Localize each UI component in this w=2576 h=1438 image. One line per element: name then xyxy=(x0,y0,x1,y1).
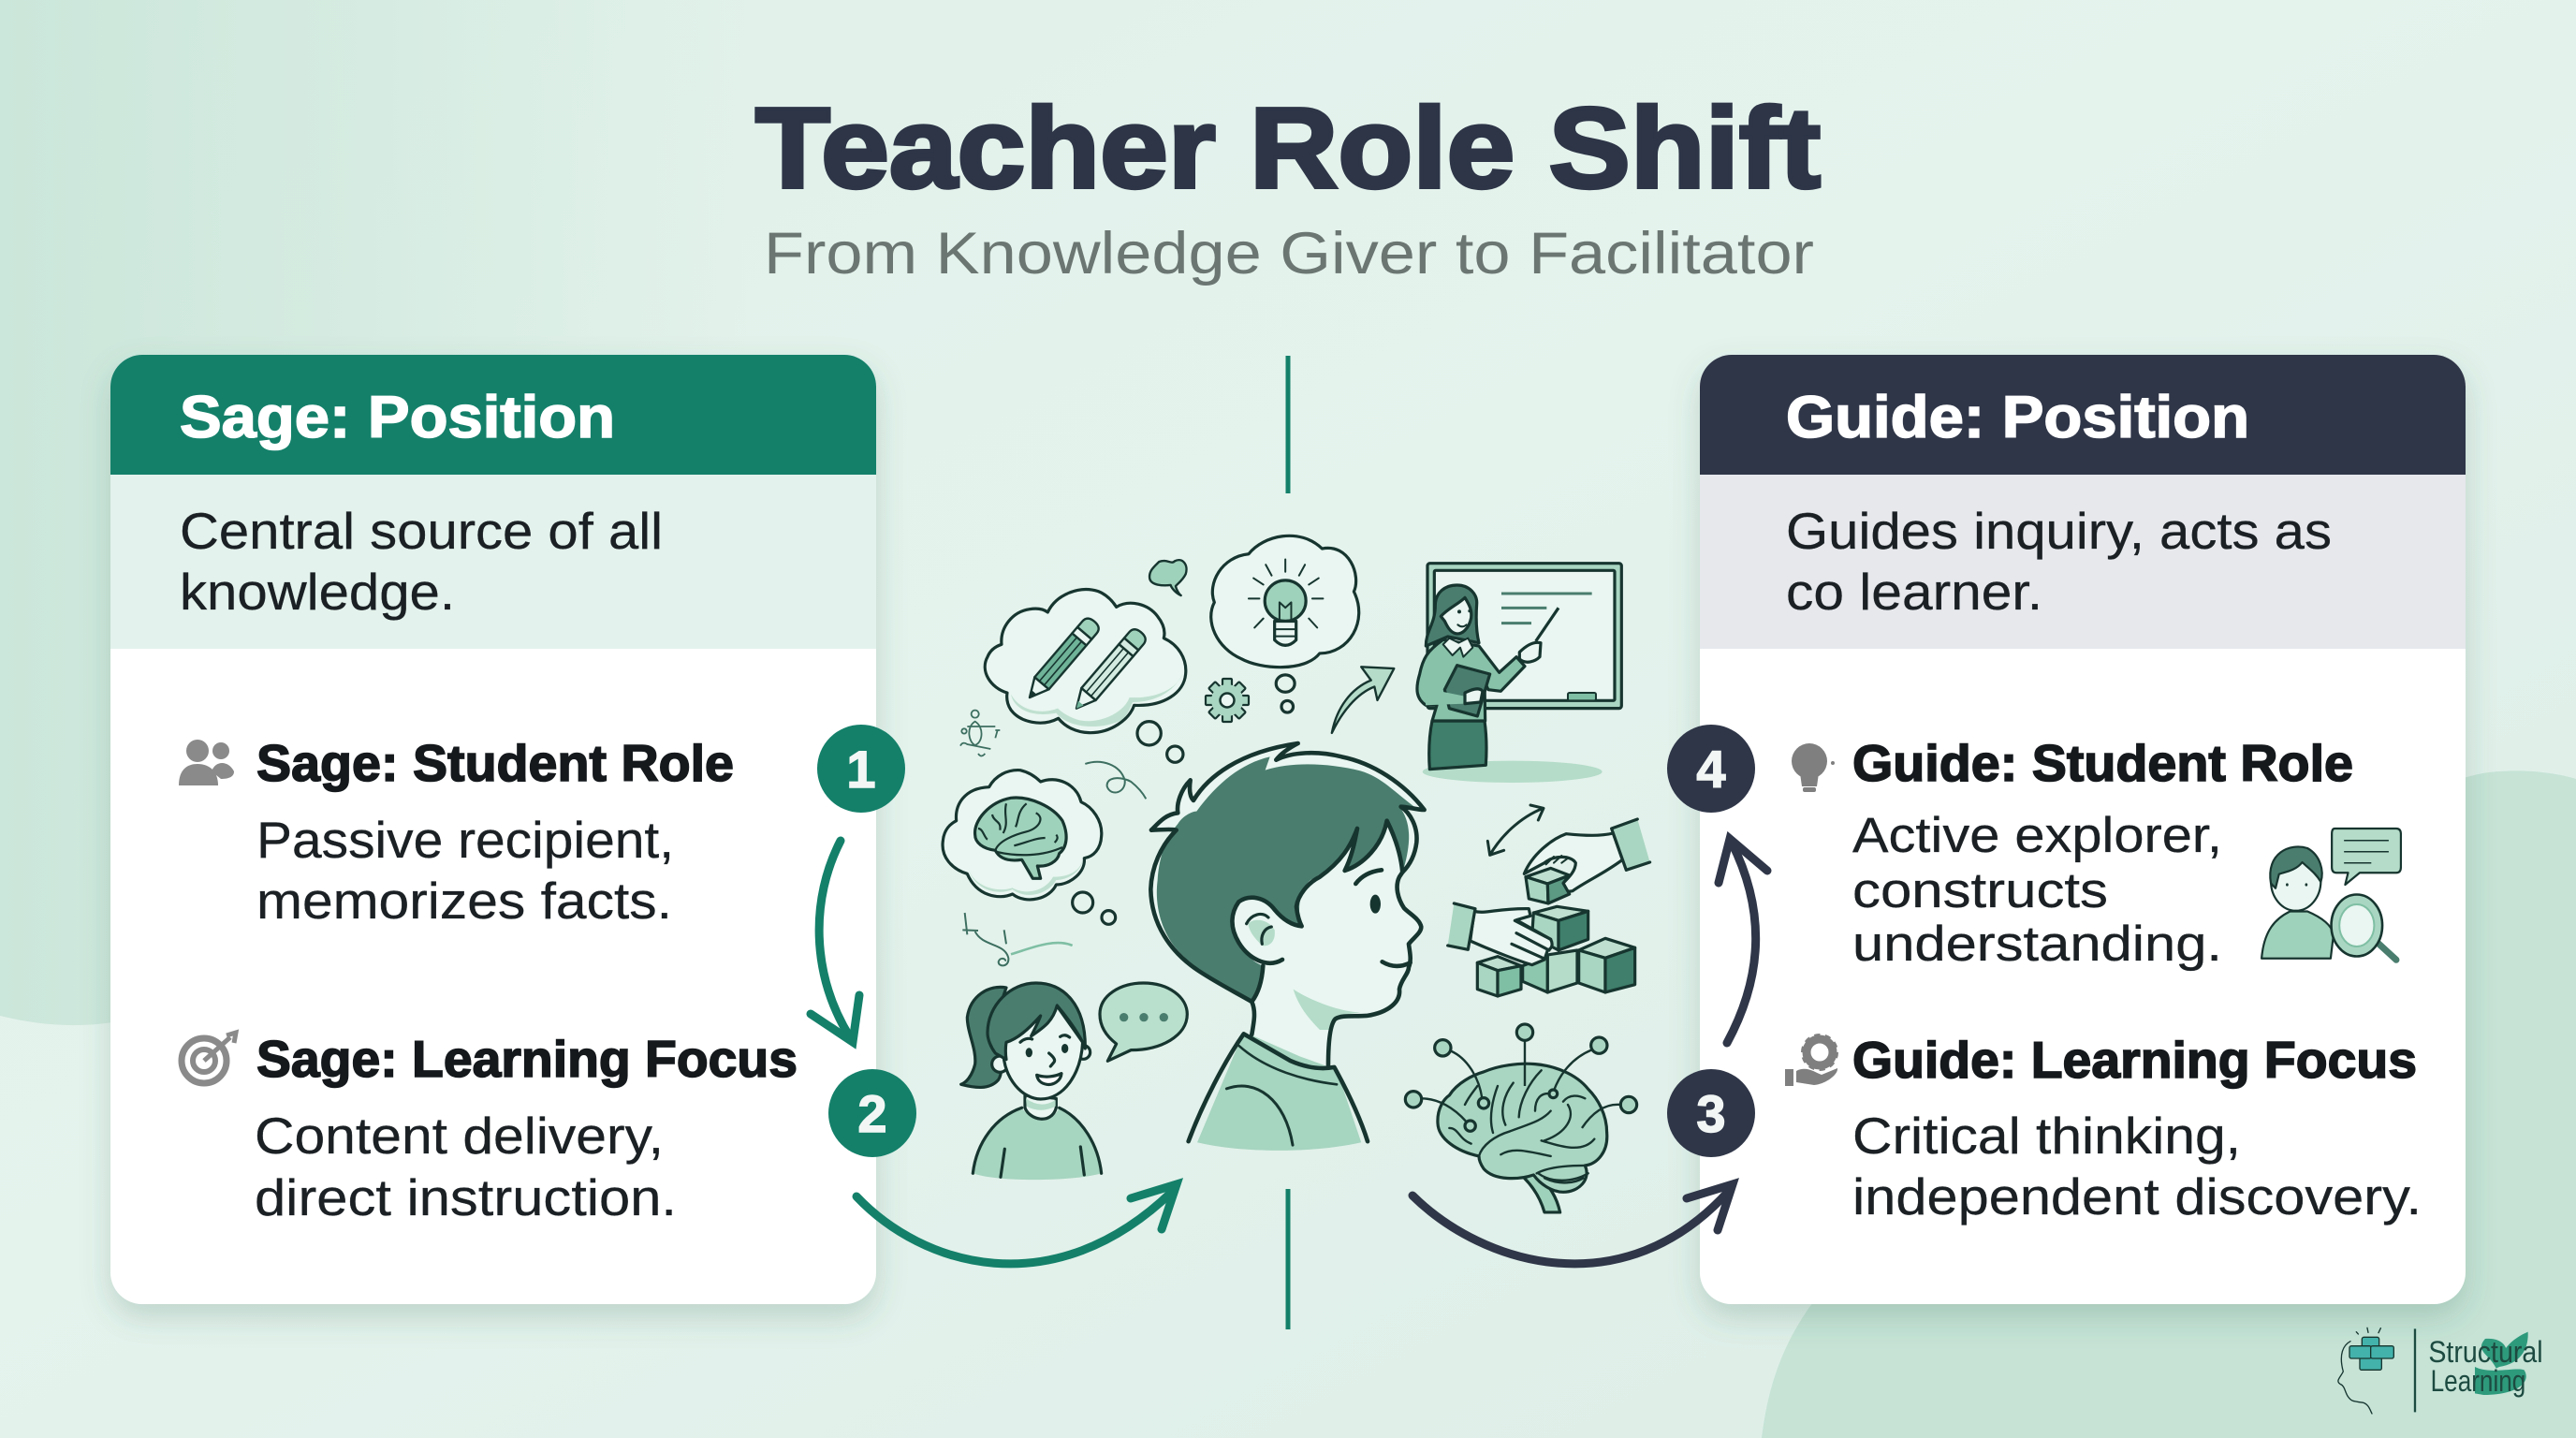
sage learning focus text: direct instruction. xyxy=(255,1168,677,1226)
arrow: 2 to centre xyxy=(856,1184,1177,1264)
divider bottom xyxy=(1286,1189,1290,1329)
step badge 1 xyxy=(817,725,905,813)
divider top xyxy=(1286,356,1290,493)
step badge 1: 1 xyxy=(846,740,876,799)
hands and blocks, connected brain xyxy=(1405,805,1650,1212)
guide header xyxy=(1700,355,2466,475)
subtitle: From Knowledge Giver to Facilitator xyxy=(764,221,1814,286)
thought cloud: lightbulb, arrow xyxy=(1211,536,1394,733)
guide learning focus text: independent discovery. xyxy=(1852,1167,2422,1225)
sage student role text: memorizes facts. xyxy=(256,872,672,930)
guide student role text: constructs xyxy=(1852,863,2108,918)
guide learning focus heading: Guide: Learning Focus xyxy=(1852,1031,2417,1089)
guide header title: Guide: Position xyxy=(1786,385,2249,450)
boy profile xyxy=(1150,743,1425,1151)
sage position text xyxy=(180,502,663,621)
icon: people xyxy=(179,740,234,785)
sage position text: knowledge. xyxy=(180,563,455,621)
sage position text: Central source of all xyxy=(180,502,663,560)
sage header title: Sage: Position xyxy=(180,385,615,450)
central illustration xyxy=(943,536,1650,1212)
sage student role heading: Sage: Student Role xyxy=(256,734,734,792)
sage header xyxy=(110,355,876,475)
guide student role text xyxy=(1852,808,2222,972)
sage student role text: Passive recipient, xyxy=(256,811,674,869)
icon: target xyxy=(182,1033,236,1083)
arrow: 1 to 2 xyxy=(811,841,859,1042)
icon: bulb xyxy=(1792,743,1835,792)
step badge 3: 3 xyxy=(1696,1084,1726,1143)
arrow: 3 to 4 xyxy=(1719,839,1767,1043)
sage learning focus text xyxy=(255,1107,677,1226)
guide position text: co learner. xyxy=(1786,563,2042,621)
guide position text xyxy=(1786,502,2332,621)
panel: guide xyxy=(1700,355,2466,1304)
guide card background xyxy=(1700,355,2466,1304)
guide position text: Guides inquiry, acts as xyxy=(1786,502,2332,560)
guide student role heading: Guide: Student Role xyxy=(1852,734,2353,792)
arrow: centre to 3 xyxy=(1412,1184,1733,1264)
teacher at whiteboard xyxy=(1417,564,1621,783)
step badge 4: 4 xyxy=(1696,740,1726,799)
step badge 2 xyxy=(828,1069,916,1157)
sage card background xyxy=(110,355,876,1304)
step badge 3 xyxy=(1667,1069,1755,1157)
icon: student with magnifier xyxy=(2261,829,2401,960)
guide position band xyxy=(1700,475,2466,649)
logo: Structural Learning xyxy=(2338,1328,2543,1414)
icon: gear xyxy=(1206,679,1249,722)
logo: Structural Learning: Structural xyxy=(2428,1334,2543,1369)
logo: Structural Learning: Learning xyxy=(2431,1363,2525,1398)
guide learning focus text: Critical thinking, xyxy=(1852,1107,2241,1165)
sage position band xyxy=(110,475,876,649)
guide learning focus text xyxy=(1852,1107,2422,1225)
panel: sage xyxy=(110,355,876,1304)
icon: hand with gear xyxy=(1785,1035,1837,1086)
guide student role text: understanding. xyxy=(1852,917,2222,972)
step badge 2: 2 xyxy=(857,1084,887,1143)
thought cloud: brain and girl xyxy=(943,770,1187,1180)
sage student role text xyxy=(256,811,674,930)
guide student role text: Active explorer, xyxy=(1852,808,2222,863)
title: Teacher Role Shift xyxy=(755,84,1821,212)
step badge 4 xyxy=(1667,725,1755,813)
sage learning focus heading: Sage: Learning Focus xyxy=(256,1030,798,1088)
sage learning focus text: Content delivery, xyxy=(255,1107,664,1165)
thought cloud: pencils xyxy=(960,560,1187,799)
